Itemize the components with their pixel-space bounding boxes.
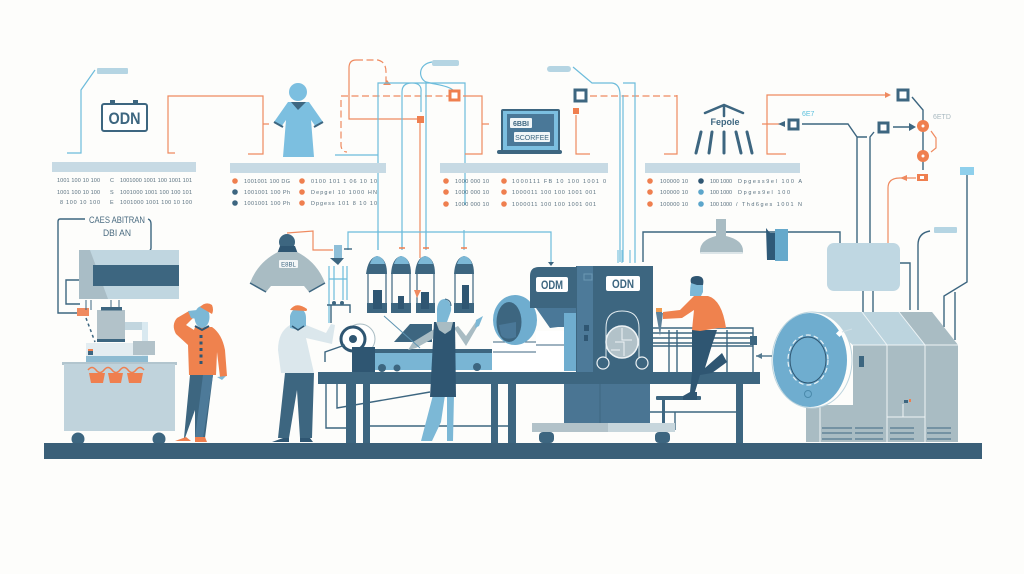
woman in apron [384, 299, 483, 441]
ODN machine: ODM [541, 278, 563, 292]
panel: list four: 100 1000 [710, 179, 732, 185]
panel: list four: / Thd6ges 1001 N [736, 202, 802, 208]
panel: list two: 1001001 100 Ph [244, 201, 290, 207]
node squares and circles: 6ETD [933, 114, 951, 121]
heading: machine caption: CAES ABITRAN [89, 215, 145, 226]
wheel assembly [325, 324, 375, 372]
panel: list four: 100000 10 [660, 179, 688, 185]
panel: list one: E [110, 200, 114, 206]
bell jars [366, 230, 474, 313]
hanging cloth [766, 228, 788, 261]
panel: list one: 8 100 10 100 [60, 200, 100, 206]
node squares and circles [417, 90, 974, 181]
panel: list one [52, 162, 196, 206]
panel: list four: 100 1000 [710, 190, 732, 196]
panel: list two: 0100 101 1 06 10 10 [311, 179, 377, 185]
worker on platform [656, 276, 727, 400]
worker in orange with raised arm [174, 303, 227, 442]
icon: ODN badge: ODN [108, 110, 140, 128]
ODN machine: ODN [612, 277, 634, 291]
panel: list three: 1000 000 10 [455, 190, 489, 196]
panel: list one: 1001 100 10 100 [57, 190, 100, 196]
panel: list four: 100000 10 [660, 190, 688, 196]
icon: laptop [497, 109, 562, 154]
tank [827, 243, 900, 291]
icon: Fepole canopy [696, 105, 752, 153]
panel: list four: 100000 10 [660, 202, 688, 208]
panel: list one: 1001000 1001 100 1001 101 [120, 178, 192, 184]
left machine [62, 250, 179, 446]
panel: list four: Dpgess9el 100 A [738, 179, 802, 185]
bust icon with label [250, 231, 333, 292]
panel: list three: 1000111 FB 10 100 1001 0 [512, 179, 606, 185]
panel: list three [440, 163, 608, 208]
worker in white shirt [272, 305, 335, 442]
large drum machine [756, 312, 958, 442]
lamp [700, 219, 743, 254]
panel: list one: 1001000 1001 100 100 101 [120, 190, 192, 196]
icon: person in blue shirt [274, 83, 323, 157]
panel: list two: Depgel 10 1000 HN [311, 190, 377, 196]
icon: laptop: SCORFEE [515, 135, 549, 142]
panel: list four: Dpges9el 100 [738, 190, 790, 196]
node squares and circles: 6E7 [802, 111, 815, 118]
icon: laptop: 6BBI [513, 121, 529, 128]
bust icon with label: E8BL [281, 262, 296, 268]
panel: list four: 100 1000 [710, 202, 732, 208]
ODN machine [530, 250, 675, 443]
heading: machine caption: DBI AN [103, 228, 131, 239]
panel: list one: C [110, 178, 114, 184]
railing [653, 328, 757, 372]
icon: ODN badge [102, 100, 147, 131]
panel: list two: 1001001 100 DG [244, 179, 290, 185]
panel: list two [230, 163, 386, 207]
panel: list one: 1001 100 10 100 [57, 178, 100, 184]
panel: list one: S [110, 190, 114, 196]
panel: list three: 1000011 100 100 1001 001 [512, 190, 596, 196]
heading: machine caption [58, 215, 151, 313]
panel: list one: 1001000 1001 100 10 100 [120, 200, 192, 206]
floor [44, 443, 982, 459]
panel: list three: 1000 000 10 [455, 202, 489, 208]
conveyor [375, 324, 534, 372]
panel: list three: 1000 000 10 [455, 179, 489, 185]
panel: list three: 1000011 100 100 1001 001 [512, 202, 596, 208]
drum front [492, 295, 537, 372]
flask stand and pipework [327, 245, 352, 323]
connector network [67, 60, 967, 340]
panel: list two: 1001001 100 Ph [244, 190, 290, 196]
panel: list two: Dpgess 101 8 10 10 [311, 201, 377, 207]
table [318, 372, 760, 444]
panel: list four [645, 163, 802, 208]
icon: Fepole canopy: Fepole [710, 117, 740, 127]
